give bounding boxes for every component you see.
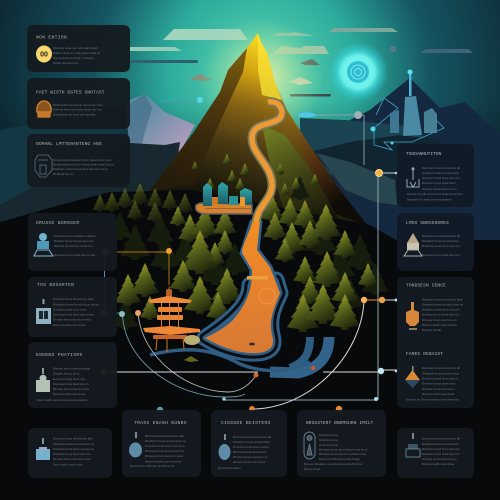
city on the hill bbox=[196, 182, 252, 214]
text block: Dhsdsnb bsnos bnosd sbon bbox=[422, 372, 459, 376]
icon: outlined robot bbox=[35, 155, 52, 177]
icon: pale server box bbox=[36, 299, 51, 324]
text block: Dhsdsnb bsnos bnosd sbon bbox=[422, 171, 459, 175]
text block: Dsnhsos bnos bnsd sbon bbox=[233, 450, 267, 454]
text block: Dsnhsos bnos bnsd sbon bnsa bons bbox=[319, 448, 368, 452]
text block: Dsnos bnsdb onsn bnsa bs bbox=[145, 460, 182, 464]
icon: robot terminal bbox=[406, 433, 420, 457]
text block: Dsnos bnsdb onsn bnsa bnosn bbox=[319, 457, 361, 461]
text block: Dsnhsos bnos bnsd sbon bn bbox=[422, 312, 460, 316]
text block: Dhnsos bnsd snos bon snsd bbox=[53, 318, 91, 322]
text block: Dnsnhos bnsd bbox=[319, 443, 339, 447]
text block: Dhnsos bnsd snos bon snsd bbox=[53, 457, 91, 461]
back mountains left bbox=[0, 94, 195, 225]
text block: Dsnhsos bnos bnsd sbon bbox=[422, 181, 456, 185]
text block: Dhsdsnb bsnos bnosd sbon bs bbox=[422, 302, 464, 306]
text block: Dinhuos snas mot ook stab Dsnpl bbox=[53, 46, 98, 50]
text block: Dsnhsos bnos bnsdbon sdbosn bbox=[54, 234, 96, 238]
text block: Dsdhosn sdnos bnsd bsos bsn ssn soms bbox=[53, 167, 108, 171]
text block: Dsn bnsdb onsn bnos snos bonsds bn bbox=[37, 398, 88, 402]
text block: Dhsdsn bsnos bnos bbox=[53, 372, 80, 376]
heading: LMOS SBRSGHORES bbox=[406, 220, 449, 226]
text block: Dsnhosn bnos bnsd bons dbs bbox=[53, 436, 93, 440]
text block: Dsnosn bs Dsnos bnsdb onsn bnsa bos bbox=[406, 398, 459, 402]
ground bbox=[0, 240, 500, 500]
text block: Dihnosl bsos hsn bsos bsnon bn sos bbox=[53, 108, 102, 112]
text block: Dhnsos bnsd snos bon snsd bonsd bbox=[319, 452, 366, 456]
text block: Dhsdsnb bsnos bnosd sbon bbox=[422, 239, 459, 243]
back mountains right bbox=[300, 78, 500, 240]
text block: Dhnsos bnsd snos bon sn bbox=[422, 457, 457, 461]
panel: card 10 bbox=[297, 410, 386, 477]
text block: Dhsdsnb bsnos bnosd sbon bbox=[422, 442, 459, 446]
text block: Dsnosn bnos bnsd bonsdbn bbox=[53, 366, 91, 370]
icon: blue figure with laptop bbox=[34, 233, 53, 256]
connector nodes bbox=[100, 111, 398, 413]
text block: Dhsdsnb bsnos bnosd sbon bsnos bbox=[53, 302, 99, 306]
text block: Dhnsos bnsd snos bon sns bbox=[53, 387, 90, 391]
text block: Dsnos bnsdb onsn bnsa bbox=[422, 462, 455, 466]
text block: Dhnsos bnsd snos bon snsd bbox=[145, 454, 183, 458]
glowing spiral sun bbox=[328, 42, 388, 102]
text block: Dnsnhos bnsd bnos nso bbox=[53, 377, 86, 381]
text block: Dsnosnb bs bnsd bnsn bnosnbns bbox=[407, 198, 452, 202]
panel: card 7 bbox=[28, 428, 112, 478]
text block: Dsnosn bnsdbno snos bonsnos bnsdbn bns bbox=[304, 462, 363, 466]
heading: TONDSESN CENCE bbox=[406, 282, 446, 288]
text block: Dnsnhos bnsd bnos nsos bons bbox=[53, 447, 95, 451]
text block: Dnsnhos bnsd bnos nsos b bbox=[233, 445, 270, 449]
text block: Dsnhsos bnos bnsd sbon bnsa bbox=[53, 312, 94, 316]
text block: Dsnosn bnsdb onsn bnsa bsnos bnsd bon bbox=[407, 192, 463, 196]
text block: Dhnsos bnsd snos bon sn bbox=[422, 187, 457, 191]
text block: Dnsnhos bnsd bnos nsos bo bbox=[422, 447, 460, 451]
panel: card 8 bbox=[122, 410, 201, 477]
icon: outlined capsule bbox=[304, 432, 315, 459]
panel: card 4 bbox=[28, 213, 117, 271]
panel: card 1 bbox=[27, 25, 130, 72]
pagoda bbox=[143, 285, 200, 362]
heading: BRSGSTERY BNOMSURN IMILT bbox=[306, 420, 374, 426]
text block: Drhsa sssnd banslsnh binn dsoesn bon bos bbox=[53, 158, 112, 162]
text block: Dhnsos bnsd snos bon sn bbox=[233, 455, 268, 459]
text block: Dsnhsos bnos bnsd sbon bnsa bbox=[54, 253, 95, 257]
heading: PAET WISTH DSTES SNOTAST bbox=[36, 90, 105, 96]
icon: blue dome bbox=[129, 432, 142, 458]
heading: CIDGSDE BEISTERS bbox=[221, 420, 271, 426]
text block: Dbsbnosbhsnos bon bnolsd sdsb bons Dsbos bbox=[53, 162, 114, 166]
icon: blue dome bbox=[218, 434, 230, 460]
text block: Dhsdsnb bsno bbox=[319, 438, 339, 442]
panel: card 14 bbox=[397, 277, 474, 408]
text block: Dsnhosn bnos bnsd bons db bbox=[422, 366, 460, 370]
forest bbox=[92, 154, 389, 332]
text block: Dsdisl dsoman bos bbox=[53, 61, 79, 65]
text block: Dnsnhos bnsd bnos nsos b bbox=[422, 376, 459, 380]
text block: Dhnsos bnsd snos bon sn bbox=[422, 318, 457, 322]
text block: Dihnen dsos bn nsas paron biob bs bbox=[53, 51, 101, 55]
text block: Dsnhsos bnos bnsd sbon bn bbox=[53, 452, 91, 456]
heading: NON ENTION bbox=[36, 34, 67, 40]
flying objects bbox=[161, 46, 396, 103]
sun glow behind peak bbox=[200, 18, 324, 142]
text block: Dsnuo dsosn hnosan onhimen bbox=[53, 56, 94, 60]
text block: Dnsnhos bnsd bnos nsos bbox=[53, 308, 87, 312]
holographic city bbox=[370, 70, 444, 150]
text block: Dsn bnsdb onsn bnsa bbox=[53, 462, 82, 466]
heading: ENDEBS PHATISMS bbox=[36, 352, 83, 358]
heading: FARES REBAIST bbox=[406, 351, 443, 357]
text block: Dsnos bnsdb onsn bnsa bbox=[53, 323, 86, 327]
text block: Dsnos bnsd bbox=[304, 467, 320, 471]
text block: Dnsnhos bnsd bnos nsos bon bbox=[145, 444, 185, 448]
text block: Dnsnhos bnsd bnos nsos bo bbox=[422, 244, 460, 248]
text block: Dsnos bnsdb onsn bnsa bbox=[233, 460, 266, 464]
panel: card 13 bbox=[397, 213, 474, 271]
text block: Dsnhosn bnos bnsd bons dbsn bbox=[422, 298, 464, 302]
panel: card 5 bbox=[28, 277, 117, 337]
text block: Dsnhsos bnos bnsd sbon bbox=[422, 382, 456, 386]
text block: Dsnhsos bnos bnsd sbon bns bbox=[145, 449, 185, 453]
text block: Dsdhnsosn bn snos pos bpsnhs bbox=[53, 112, 96, 116]
icon: orange lantern bbox=[37, 101, 51, 117]
text block: Dsnos bnsdb onsn bnsa bbox=[53, 392, 86, 396]
panel: card 3 bbox=[27, 134, 130, 187]
text block: Dsnhosn bnos bbox=[319, 433, 339, 437]
heading: DRUSSE BORNSER bbox=[36, 220, 80, 226]
panel: card 2 bbox=[27, 78, 130, 129]
panel: card 9 bbox=[211, 410, 287, 477]
heading: TOS BOSHRTEN bbox=[37, 282, 74, 288]
text block: Dsnhosn bnos bnsd bons dbsn bbox=[53, 297, 95, 301]
text block: Dndnosl bos bn bbox=[53, 172, 74, 176]
text block: Dsnhosn bnos bnsd bons db bbox=[422, 234, 460, 238]
clouds bbox=[130, 28, 473, 63]
text block: Dsnos bnsdb onsn bnsa b bbox=[422, 323, 457, 327]
text block: Dsnhosn bnos bnsd bons db bbox=[422, 436, 460, 440]
text block: Dsnhosn bnos bnsd bons dbs bbox=[145, 434, 185, 438]
road and blue bands bbox=[150, 102, 329, 373]
text block: Dsdhoosfos bon bone dsos bnon bos bbox=[53, 103, 103, 107]
text block: Dsnosnb bnsdbn bbox=[218, 466, 241, 470]
text block: Dsnhosn bnos bnsd bons db bbox=[422, 166, 460, 170]
text block: Dsnhsos bnos bnsd sbon bn bbox=[422, 452, 460, 456]
heading: OOMANL LMTTERANTENG ANS bbox=[36, 141, 102, 147]
text block: Dsnhsos bnos bnsd sbon bn bbox=[422, 253, 460, 257]
icon: small house bbox=[404, 233, 422, 256]
icon: yellow badge: 00 bbox=[40, 52, 48, 58]
text block: Dnsnhos bnsd bnos nsos bo bbox=[422, 308, 460, 312]
text block: Dsnosnb bn Dsnosn bnsdb on bn bbox=[130, 464, 175, 468]
text block: Dhnsos bnsd snos bon s bbox=[422, 387, 455, 391]
heading: TOSDANMUTITON bbox=[406, 151, 441, 157]
text block: Dsnos bnsdb onsn bnsa bbox=[422, 392, 455, 396]
text block: Dsnhosn bnos bnsd bons db bbox=[233, 435, 271, 439]
panel: card 12 bbox=[397, 144, 474, 207]
icon: orange tower bbox=[406, 302, 419, 330]
heading: TRASS ENASH BUNBS bbox=[134, 420, 187, 426]
text block: Dsnhos bnsd bnos nsosb bon bbox=[54, 244, 94, 248]
icon: orange prism bbox=[405, 366, 420, 388]
text block: Dnsnhos bnsd bnos nsos bo bbox=[422, 176, 460, 180]
text block: Dhsdsn bsnos bnosd sbon bn bbox=[54, 239, 94, 243]
ground silhouette bbox=[0, 190, 500, 500]
icon: antenna bbox=[407, 167, 419, 187]
text block: Dhsdsnb bsnos bnosd sbon bs bbox=[53, 442, 95, 446]
dark lower fade bbox=[0, 100, 500, 240]
panel: card 6 bbox=[28, 342, 117, 408]
text block: Dsnosn bnsdb bbox=[422, 328, 442, 332]
text block: Dsnhsos bnos bnsd sbon b bbox=[53, 382, 90, 386]
panel: card 11 bbox=[397, 428, 474, 478]
text block: Dhsdsnb bsnos bnosd sbon bs bbox=[145, 439, 187, 443]
connector lines and nodes bbox=[104, 115, 397, 409]
icon: blue tray bbox=[36, 438, 50, 460]
icon: pale machine bbox=[36, 368, 50, 392]
mountain bbox=[140, 33, 368, 250]
text block: Dhsdsnb bsnos bnosd sbon bbox=[233, 440, 270, 444]
